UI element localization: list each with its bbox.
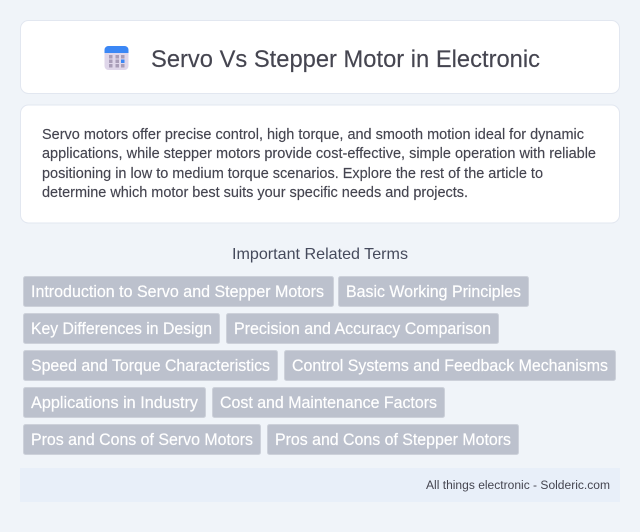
tag: Cost and Maintenance Factors [220, 394, 437, 412]
tag: Introduction to Servo and Stepper Motors [31, 283, 324, 301]
tag [338, 276, 528, 306]
tag [226, 314, 498, 344]
tag [24, 276, 334, 306]
tag: Pros and Cons of Servo Motors [31, 431, 253, 449]
tag [268, 424, 518, 454]
tag [24, 388, 206, 418]
title: Servo Vs Stepper Motor in Electronic [151, 46, 540, 73]
tag [24, 314, 220, 344]
tag: Basic Working Principles [346, 283, 521, 301]
tag: Pros and Cons of Stepper Motors [275, 431, 511, 449]
tag [284, 350, 616, 380]
tag: Control Systems and Feedback Mechanisms [292, 357, 608, 375]
text block: intro: determine which motor best suits your specific needs and projects. [42, 185, 468, 201]
footer [20, 468, 620, 502]
tag list [24, 276, 616, 454]
tag: Speed and Torque Characteristics [31, 357, 270, 375]
text block: intro: Servo motors offer precise control, high torque, and smooth motion ideal for dynamic [42, 127, 584, 143]
tag: Key Differences in Design [31, 320, 212, 338]
text block: intro: applications, while stepper motors provide cost-effective, simple operation with reliable [42, 146, 596, 162]
text block: intro [42, 127, 596, 201]
tag: Precision and Accuracy Comparison [234, 320, 491, 338]
icon: calendar [104, 46, 128, 70]
tag [212, 388, 444, 418]
panel: header [20, 20, 620, 94]
tag [24, 350, 278, 380]
footer: All things electronic - Solderic.com [426, 478, 610, 492]
panel: intro paragraph [20, 105, 620, 223]
tag: Applications in Industry [31, 394, 199, 412]
tag [24, 424, 260, 454]
text block: intro: positioning in low to medium torque scenarios. Explore the rest of the article to [42, 166, 543, 182]
heading: related terms: Important Related Terms [232, 246, 408, 263]
